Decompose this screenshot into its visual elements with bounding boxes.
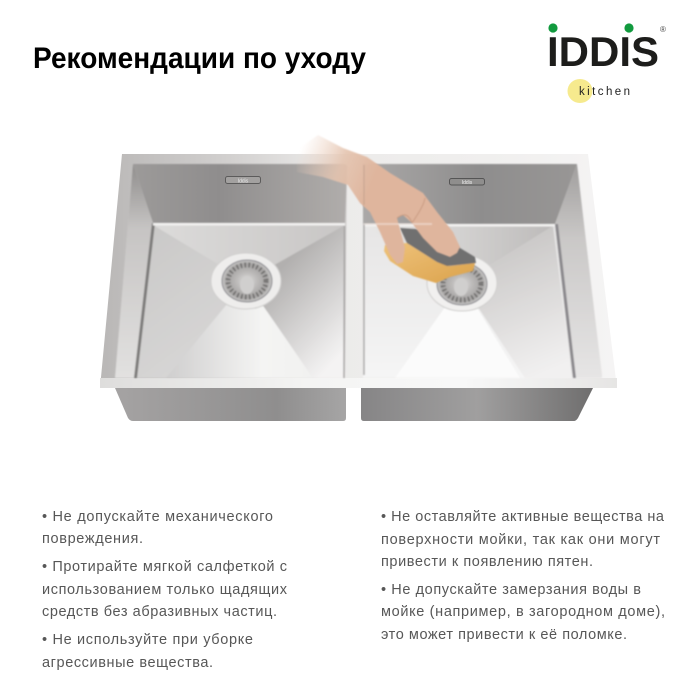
- text column right: [381, 509, 665, 643]
- logo: IDDIS kitchen: ®: [660, 25, 666, 34]
- text column left: • Протирайте мягкой салфеткой с: [42, 559, 287, 575]
- right bowl outer box: [361, 388, 593, 421]
- title: Рекомендации по уходу: [33, 42, 366, 75]
- text column right: • Не допускайте замерзания воды в: [381, 582, 641, 598]
- text column right: мойке (например, в загородном доме),: [381, 604, 665, 620]
- hand: [296, 135, 460, 264]
- text column right: поверхности мойки, так как они могут: [381, 532, 660, 548]
- text column left: агрессивные вещества.: [42, 655, 213, 671]
- overflow plate right: Iddis: [462, 180, 473, 186]
- drain left: [211, 253, 281, 309]
- text column left: [42, 509, 288, 671]
- sink illustration: [42, 135, 665, 671]
- text column right: это может привести к её поломке.: [381, 627, 627, 643]
- text column right: привести к появлению пятен.: [381, 554, 593, 570]
- front flange edge: [100, 378, 617, 388]
- overflow plate left: [226, 176, 260, 184]
- logo: IDDIS kitchen: [547, 23, 666, 103]
- left bowl: [115, 164, 347, 378]
- text column left: • Не используйте при уборке: [42, 632, 253, 648]
- text column left: • Не допускайте механического: [42, 509, 273, 525]
- overflow plate left: Iddis: [238, 178, 249, 184]
- logo: IDDIS kitchen: kitchen: [579, 86, 630, 98]
- text column left: средств без абразивных частиц.: [42, 604, 277, 620]
- logo: IDDIS kitchen: IDDIS: [547, 28, 659, 75]
- sink flange: [100, 154, 617, 388]
- text column left: повреждения.: [42, 531, 143, 547]
- overflow plate right: [450, 178, 484, 186]
- left bowl outer box: [115, 388, 346, 421]
- text column left: использованием только щадящих: [42, 582, 288, 598]
- sponge: [384, 228, 476, 283]
- right bowl: [363, 164, 602, 378]
- drain right: [427, 255, 497, 311]
- text column right: • Не оставляйте активные вещества на: [381, 509, 665, 525]
